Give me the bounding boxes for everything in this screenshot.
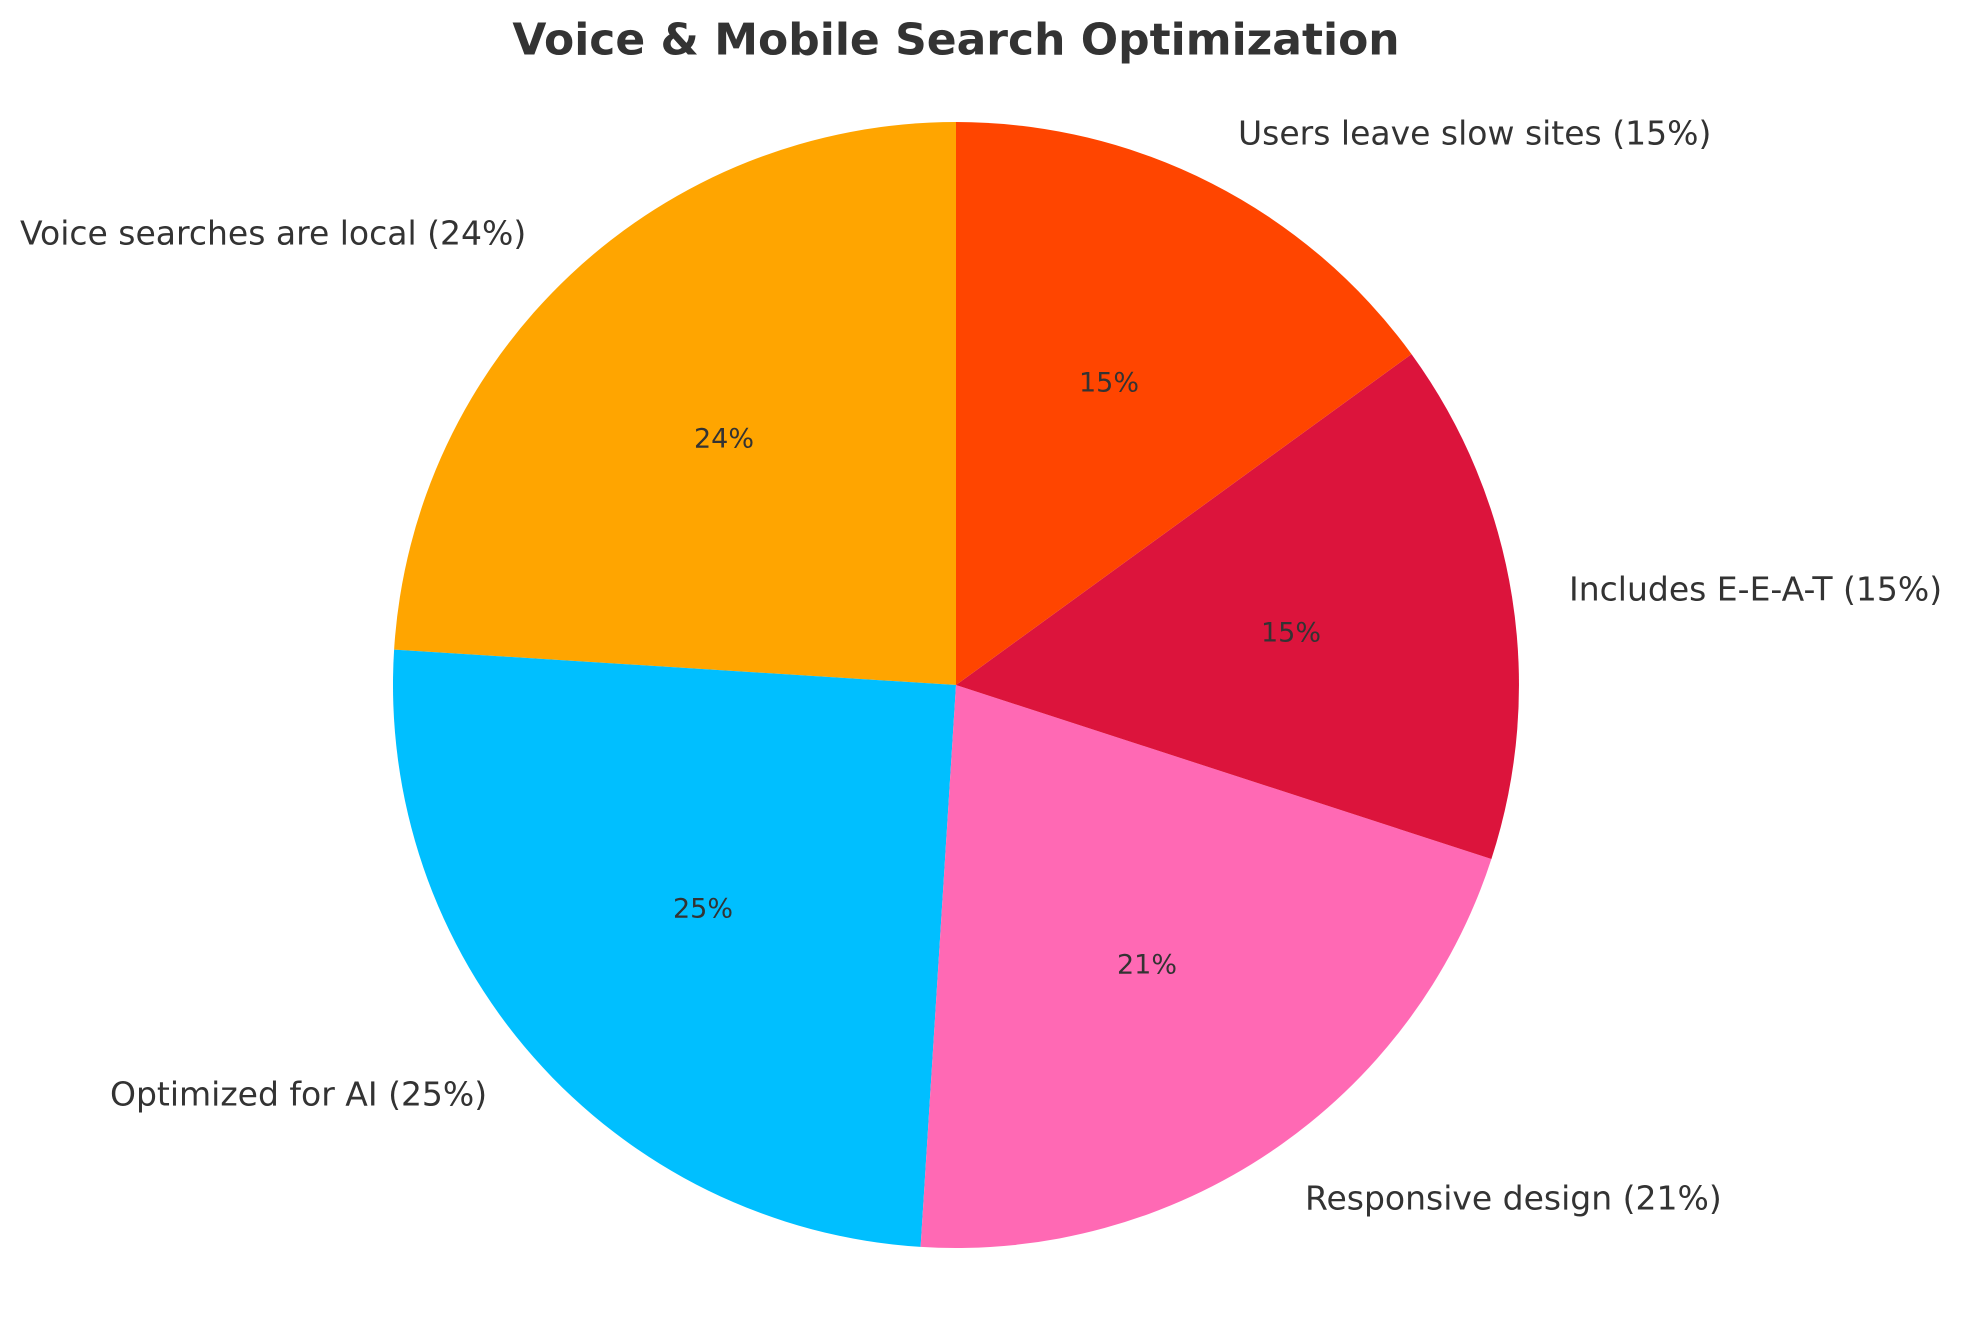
percentage labels: 15% (1079, 368, 1139, 398)
percentage labels: 24% (694, 424, 754, 454)
slice: voice searches are local (394, 122, 956, 685)
category labels: Users leave slow sites (15%) (1238, 114, 1711, 152)
category labels: Includes E-E-A-T (15%) (1569, 570, 1942, 608)
percentage labels: 25% (673, 894, 733, 924)
category labels: Optimized for AI (25%) (110, 1074, 487, 1114)
percentage labels: 21% (1117, 950, 1177, 980)
category labels: Voice searches are local (24%) (20, 214, 526, 252)
slice: responsive design (921, 685, 1491, 1248)
slice: optimized for AI (393, 650, 956, 1247)
slice: includes E-E-A-T (956, 354, 1519, 859)
category labels: Responsive design (21%) (1305, 1178, 1722, 1218)
percentage labels (673, 368, 1321, 980)
title: Voice & Mobile Search Optimization (512, 14, 1400, 66)
percentage labels: 15% (1261, 618, 1321, 648)
pie chart (393, 122, 1519, 1248)
slice: users leave slow sites (956, 122, 1412, 685)
